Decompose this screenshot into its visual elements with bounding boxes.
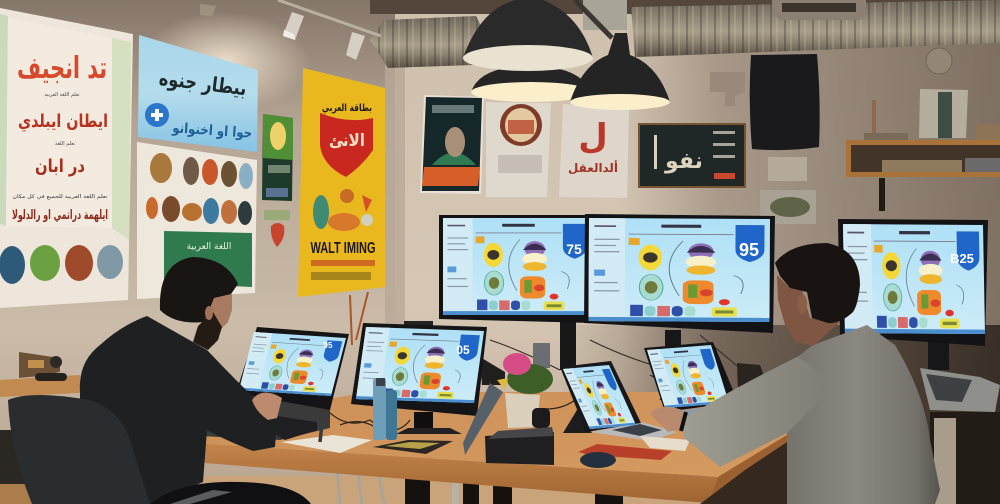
table [192, 392, 787, 503]
poster: large Arabic poster: ايطان ايبلدي [18, 111, 108, 132]
chair [8, 395, 232, 504]
small picture [760, 190, 816, 224]
laptop: right person laptop [644, 342, 745, 420]
poster: blue social poster [138, 35, 258, 152]
ceiling [370, 0, 1000, 14]
banner: yellow poster [298, 68, 385, 345]
poster: small green card [262, 114, 293, 201]
poster: red calligraphy: ل [578, 117, 608, 157]
black device box [485, 427, 554, 465]
ear [205, 306, 213, 320]
grey device [533, 343, 550, 368]
small black cup [532, 408, 550, 428]
poster: large Arabic poster: تعلم اللغة العربية [44, 92, 80, 98]
icon: plus badge [145, 103, 169, 127]
poster: large Arabic poster: در ابان [35, 156, 85, 177]
legs [150, 482, 311, 504]
back lamp shade [471, 66, 591, 102]
person right [650, 243, 940, 504]
camera [19, 352, 67, 381]
wall speaker [750, 54, 820, 150]
right wall shading [620, 0, 1000, 504]
back wall right [395, 0, 1000, 504]
poster: red calligraphy: ألدالعقل [568, 160, 618, 175]
front lamp shade [463, 0, 593, 71]
pendant lamps [463, 0, 670, 110]
monitor: center wall monitor [584, 214, 775, 370]
table cables [325, 375, 663, 435]
laptop: tablet on stand [560, 361, 677, 441]
icon: strawberry sticker [264, 210, 290, 247]
wall note [768, 157, 807, 181]
person left [80, 257, 311, 504]
page sheet [640, 436, 690, 451]
monitor: desk monitor [351, 321, 487, 434]
clutter behind flower [480, 357, 505, 385]
chair legs and table legs [337, 468, 623, 504]
air duct [370, 0, 1000, 68]
water bottle [373, 378, 397, 440]
poster: red calligraphy [559, 104, 629, 198]
shelf [846, 89, 1000, 211]
light glow on left wall [140, 12, 310, 112]
right cabinet and keyboard [920, 368, 1000, 504]
sweater arm [683, 357, 825, 467]
banner: yellow poster: WALT IMING [310, 240, 376, 257]
ear [797, 294, 807, 314]
colorful tray [373, 440, 453, 454]
poster: large Arabic poster: ايلهمة دراتمي او رالدلولا [12, 208, 108, 223]
wall clock [926, 48, 952, 74]
hand [650, 407, 684, 432]
mouse [580, 452, 616, 468]
pen [320, 414, 323, 442]
banner: yellow poster: بطاقة العربي [322, 103, 372, 114]
monitor: center wall monitor: 95 [739, 240, 759, 260]
monitor: desk monitor: 05 [456, 343, 470, 357]
desk clutter [737, 363, 770, 392]
sweater body [772, 325, 940, 504]
poster: blue social poster: بيطار جنوه [158, 66, 248, 100]
poster: character grid [137, 142, 257, 299]
poster: large Arabic poster [0, 8, 133, 308]
hair [160, 257, 238, 322]
poster: character grid: اللغة العربية [187, 242, 231, 252]
track lights [200, 0, 381, 60]
laptop: left person laptop [200, 327, 349, 440]
hand [252, 392, 282, 420]
red book [578, 444, 672, 460]
face [205, 294, 232, 345]
ceiling vent [772, 0, 866, 20]
poster: white emblem [486, 102, 551, 197]
monitor: left wall monitor [439, 215, 592, 370]
wall cables [490, 335, 760, 385]
framed sign: نفو [664, 149, 703, 174]
laptop: left person laptop: 95 [324, 341, 333, 350]
poster: portrait [420, 95, 484, 194]
left side table [0, 375, 80, 504]
wall corner [385, 60, 405, 504]
back wall left [0, 0, 395, 504]
banner: yellow poster: الانئ [329, 131, 365, 151]
poster: blue social poster: حوا او اخنوانو [171, 120, 253, 142]
monitor: right wall monitor [838, 219, 988, 370]
wall device [710, 72, 745, 106]
lower wall shading [560, 325, 1000, 504]
beard [193, 312, 222, 350]
poster: large Arabic poster: تد انجيف [17, 51, 107, 86]
under table shadow [700, 440, 790, 504]
body [80, 316, 277, 504]
monitor: left wall monitor: 75 [566, 241, 582, 257]
poster: large Arabic poster: تعلم اللغة [55, 141, 76, 147]
watch [681, 412, 686, 431]
monitor: right wall monitor: B25 [950, 251, 974, 266]
notebook [281, 435, 372, 453]
neck and face [777, 275, 840, 346]
potted flower [497, 353, 553, 428]
tilted tablet [463, 383, 503, 455]
floor [200, 476, 790, 504]
right lamp shade [570, 33, 670, 110]
framed sign [639, 124, 745, 187]
head hair [775, 243, 860, 323]
poster: large Arabic poster: تعلم اللغة العربية للجميع في كل مكان [12, 194, 108, 200]
